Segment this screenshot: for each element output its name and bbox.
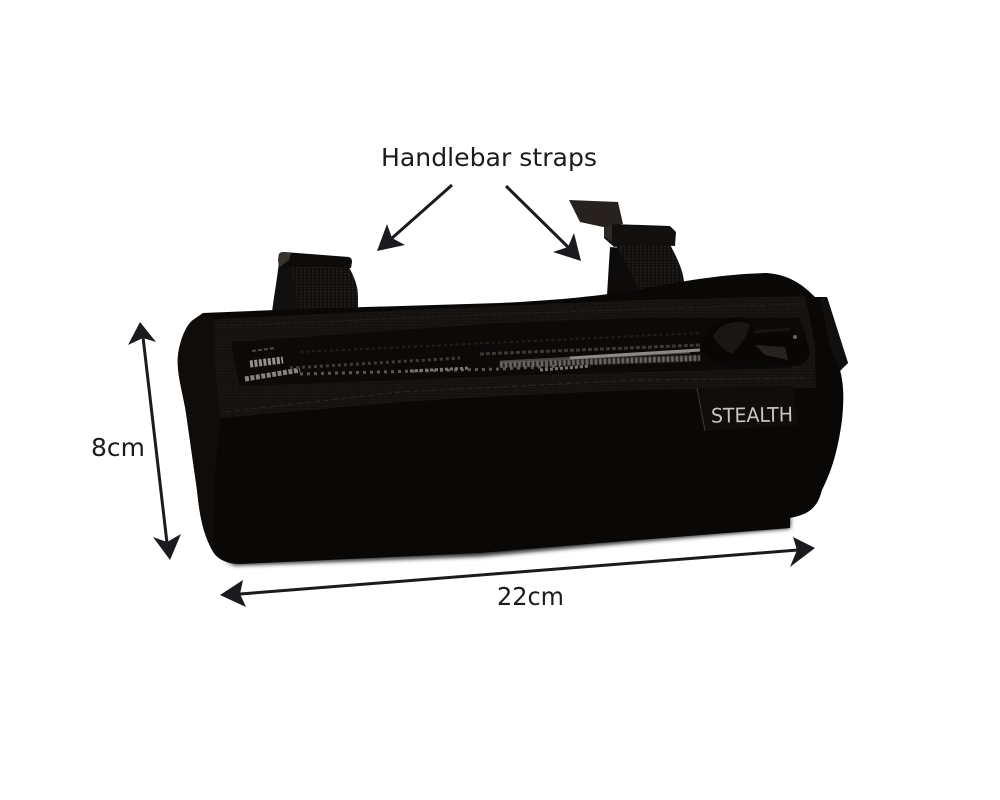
label: height: 8cm <box>91 433 145 462</box>
arrow: to right strap <box>506 186 581 261</box>
heading: handlebar straps: Handlebar straps <box>381 143 597 172</box>
label: width: 22cm <box>497 582 564 611</box>
brand label <box>697 386 798 431</box>
arrow: width dimension <box>220 537 815 607</box>
end tab right <box>820 297 848 371</box>
left handlebar strap <box>272 252 358 312</box>
bag body <box>178 273 848 564</box>
right handlebar strap with buckle <box>569 200 684 296</box>
zipper pull toggle <box>701 317 809 367</box>
ground shadow <box>225 516 790 565</box>
arrow: to left strap <box>377 185 452 251</box>
brand label: STEALTH <box>711 402 793 428</box>
product photo: handlebar bag <box>178 200 848 564</box>
webbing band around zipper <box>214 296 816 418</box>
zipper gloss highlights <box>245 333 700 379</box>
stitching <box>225 378 810 412</box>
zipper channel <box>232 318 810 386</box>
end panel left <box>178 313 221 553</box>
arrow: height dimension <box>128 322 181 560</box>
